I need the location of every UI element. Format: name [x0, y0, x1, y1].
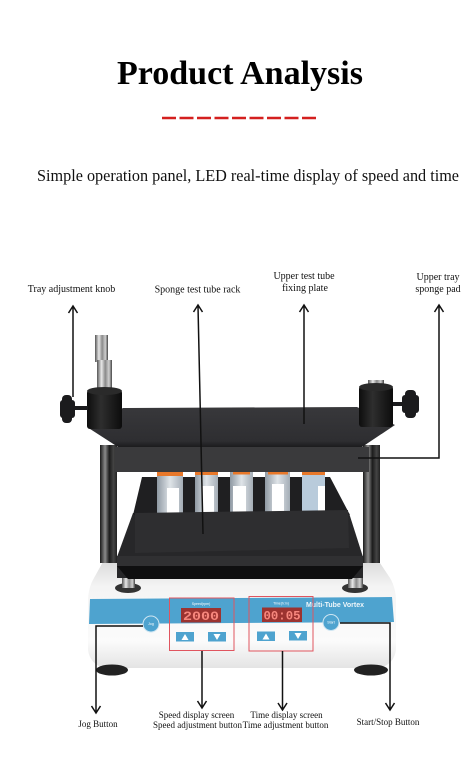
start/stop button: Start — [327, 620, 335, 624]
callout: time display and adjustment: Time adjustment button — [243, 720, 329, 730]
callout: jog button: Jog Button — [78, 719, 118, 729]
title: Product Analysis — [117, 55, 363, 92]
callout: speed display and adjustment — [153, 651, 242, 730]
time adjustment buttons — [257, 631, 307, 641]
red highlight box: speed — [170, 598, 234, 650]
callout: start/stop button: Start/Stop Button — [357, 717, 420, 727]
product illustration: multi-tube vortex mixer — [60, 335, 419, 676]
callout: speed display and adjustment: Speed adjustment button — [153, 720, 242, 730]
jog button: Jog — [148, 622, 154, 626]
callout: speed display and adjustment: Speed display screen — [159, 710, 235, 720]
left column and shaft — [87, 335, 122, 429]
brand label: Multi-Tube Vortex — [306, 602, 364, 609]
upper tray sponge pad — [115, 447, 369, 472]
callout: sponge test tube rack: Sponge test tube rack — [155, 284, 240, 296]
test tubes — [157, 472, 325, 515]
speed display: 2000 — [183, 609, 219, 624]
callout: upper tray sponge pad: Upper tray — [416, 272, 460, 283]
callout: jog button — [78, 626, 143, 729]
callout: time display and adjustment — [243, 651, 329, 730]
callout: time display and adjustment: Time display screen — [250, 710, 323, 720]
speed display — [181, 602, 221, 624]
start/stop button — [323, 614, 339, 630]
callout: tray adjustment knob: Tray adjustment knob — [28, 284, 115, 295]
lower sponge tray — [117, 477, 363, 579]
left tray adjustment knob — [60, 395, 88, 423]
time display: Time(h:m) — [273, 602, 289, 606]
upper test tube fixing plate — [87, 407, 395, 447]
blue control band — [89, 597, 394, 624]
red dashed divider — [162, 117, 318, 119]
time display — [262, 602, 302, 624]
right tray adjustment knob — [393, 390, 419, 418]
chrome poles — [100, 445, 380, 588]
callout: upper tray sponge pad — [358, 272, 461, 458]
time display: 00:05 — [264, 608, 301, 624]
sponge test tube rack — [135, 510, 349, 553]
callout: start/stop button — [340, 623, 420, 727]
callout: tray adjustment knob — [28, 284, 115, 397]
subtitle: Simple operation panel, LED real-time display of speed and time — [37, 166, 459, 185]
callout: upper test tube fixing plate: fixing plate — [282, 283, 328, 294]
callout: upper test tube fixing plate — [273, 271, 335, 424]
callout: upper test tube fixing plate: Upper test tube — [273, 271, 335, 282]
jog button — [143, 616, 159, 632]
red highlight box: time — [249, 596, 313, 651]
right column and shaft — [359, 380, 393, 427]
callout: sponge test tube rack — [155, 284, 240, 534]
base unit — [88, 560, 396, 676]
speed display: Speed(rpm) — [192, 602, 210, 606]
speed adjustment buttons — [176, 632, 226, 642]
callout: upper tray sponge pad: sponge pad — [415, 284, 461, 295]
